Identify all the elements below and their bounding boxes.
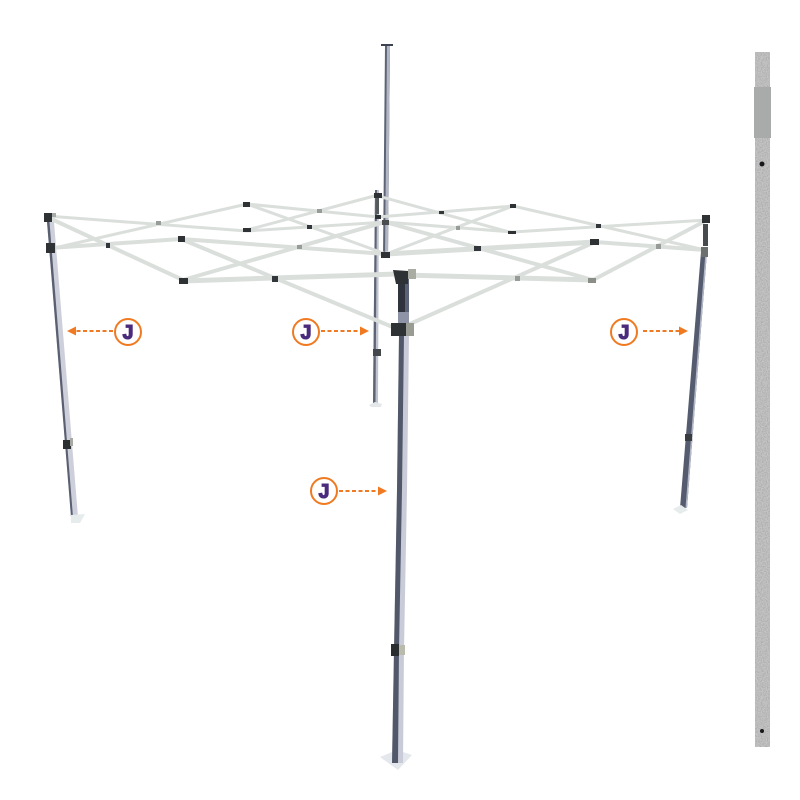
centre pole [381,44,393,258]
back-right scissors [378,196,707,254]
truss joints [44,193,710,336]
roof truss: scissor bars [47,195,707,328]
callout: J, back leg [293,319,369,346]
callout: J, back leg: J [300,323,312,346]
back leg [369,190,382,407]
callout: J, front leg: J [318,482,330,505]
back leg and centre pole [369,44,393,407]
callout: J, right leg [611,319,688,346]
callout: J, left leg: J [122,323,134,346]
front-right scissors [385,220,707,327]
front leg clamp [391,644,405,656]
front leg [380,278,412,770]
left leg [47,222,85,523]
tube sleeve [754,87,771,138]
corner brackets [44,213,710,336]
tube body [755,52,770,747]
callout: J, right leg: J [618,323,630,346]
detail: single leg tube [754,52,771,747]
front leg base plate [380,752,412,770]
callout: J, front leg [311,478,387,505]
back-left scissors [47,195,386,254]
slider brackets [178,193,599,284]
right leg [673,252,707,514]
scissor pivots [106,209,661,282]
front-left scissors [47,217,397,328]
tube holes [760,162,764,733]
callout: J, left leg [67,319,141,346]
